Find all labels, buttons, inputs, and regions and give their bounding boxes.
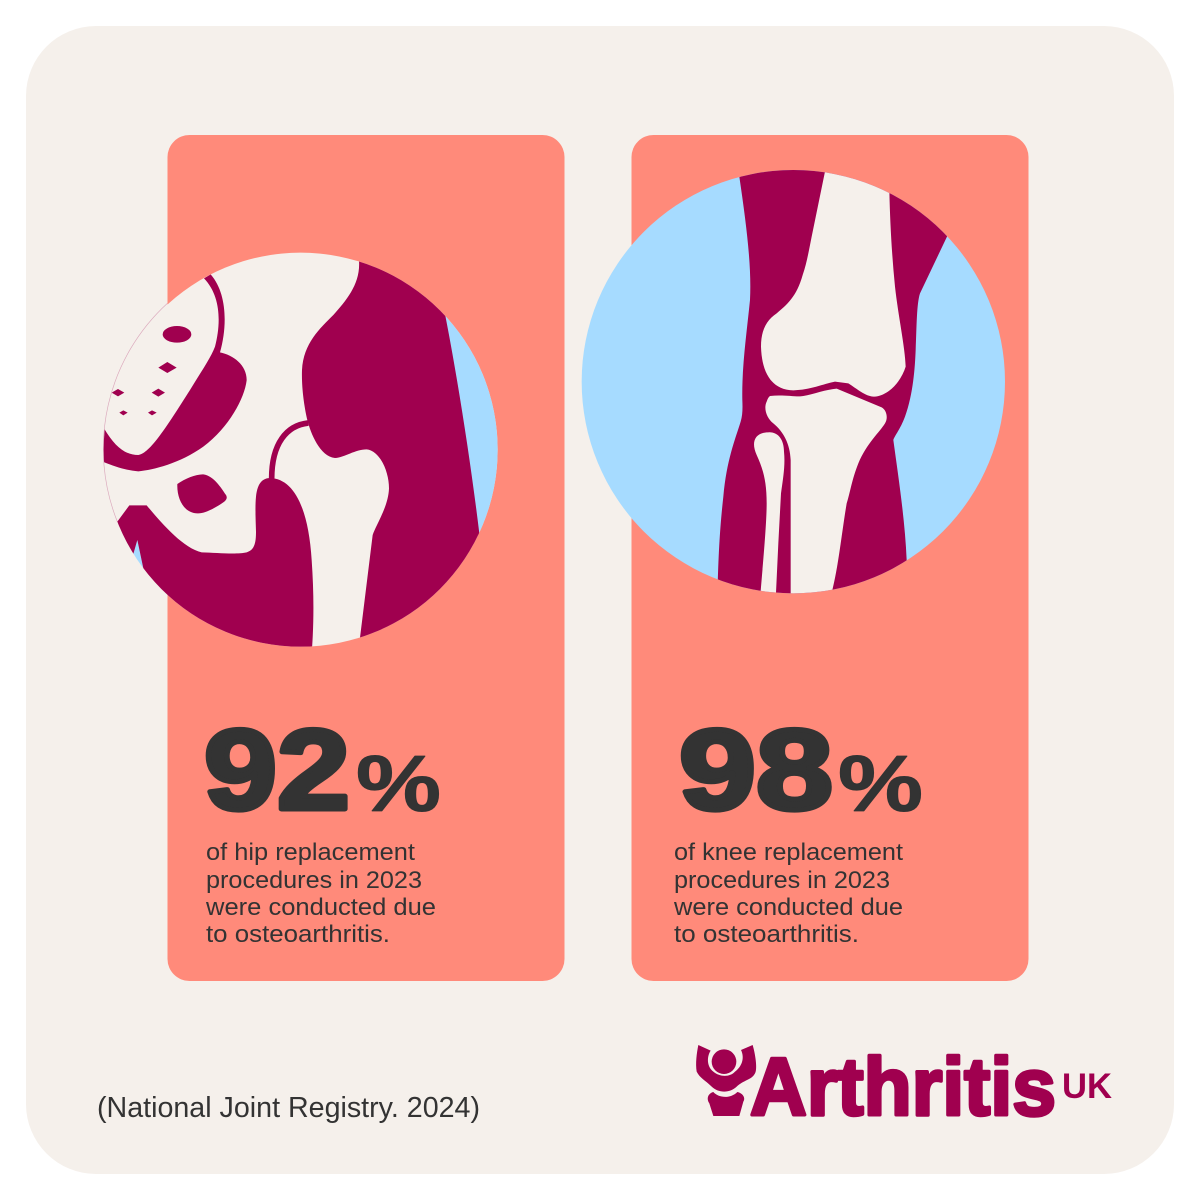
icon: person with raised arms: [696, 1045, 756, 1116]
panel background: knee: [632, 135, 1028, 981]
statistic: 98 percent: 98: [679, 707, 833, 834]
statistic: 92 percent: %: [356, 739, 441, 828]
description: hip: procedures in 2023: [206, 867, 422, 894]
description: hip: of hip replacement: [206, 839, 415, 866]
illustration: hip joint: [103, 252, 498, 647]
source citation: (National Joint Registry. 2024): [97, 1092, 480, 1124]
illustration: knee joint: [582, 170, 1005, 594]
panel: hip replacement: [90, 135, 564, 981]
description: knee: to osteoarthritis.: [674, 921, 859, 948]
description: knee: were conducted due: [673, 894, 903, 921]
description: knee: of knee replacement: [674, 839, 903, 866]
statistic: 98 percent: %: [838, 739, 923, 828]
wordmark: Arthritis: [750, 1042, 1056, 1133]
description: hip: were conducted due: [205, 894, 436, 921]
panel background: hip: [168, 135, 564, 981]
description: hip: to osteoarthritis.: [206, 921, 390, 948]
logo: Arthritis UK: [696, 1042, 1112, 1133]
statistic: 98 percent: [679, 707, 923, 834]
statistic: 92 percent: [204, 707, 441, 834]
description: knee: [673, 839, 903, 948]
description: hip: [205, 839, 436, 948]
description: knee: procedures in 2023: [674, 867, 890, 894]
panel: knee replacement: [570, 135, 1028, 981]
wordmark suffix: UK: [1062, 1067, 1112, 1106]
statistic: 92 percent: 92: [204, 707, 350, 834]
